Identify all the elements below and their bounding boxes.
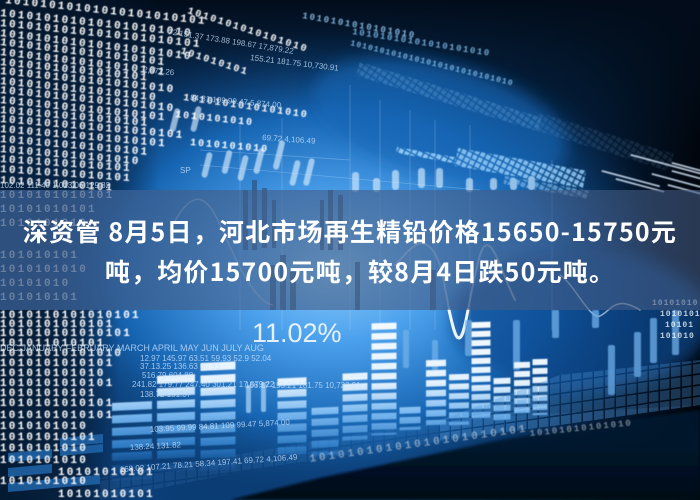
binary rows upper left: 1010101010101010101010 bbox=[0, 8, 193, 40]
binary rows upper left: 1010101010101010101010 bbox=[0, 28, 193, 64]
binary column right: 101010 bbox=[660, 332, 695, 341]
binary rows upper left: 10101010101010101010 bbox=[0, 85, 176, 115]
binary rows upper left: 10101010101010101010101 bbox=[0, 18, 202, 51]
binary rows upper left: 101010101010101010101 bbox=[0, 114, 185, 142]
binary rows lower left: 1010101010101 bbox=[0, 410, 114, 422]
month axis and small numeric table: 168.02 107.21 78.21 58.34 197.41 69.72 4,106.49 bbox=[120, 453, 298, 474]
binary rows upper left: 1010101010101010101 bbox=[0, 37, 167, 69]
binary rows lower left: 1010101010101 bbox=[0, 378, 114, 390]
binary rows upper left: 10101010101010101010 bbox=[0, 66, 176, 96]
binary rows upper left: 10101010101010101 bbox=[0, 105, 150, 130]
small numeric labels upper: SP bbox=[180, 166, 191, 175]
binary rows upper left: 101010101010101010 bbox=[0, 76, 158, 105]
binary rows lower left: 1010101010101 bbox=[0, 398, 114, 410]
binary rows upper left: 10101010101010101 bbox=[0, 134, 150, 159]
tile floor right bbox=[100, 360, 700, 500]
binary rows upper left: 1010101010101010101 bbox=[0, 47, 167, 79]
binary rows upper left: 1010101010101010 bbox=[182, 93, 309, 122]
top right binary stream: 1010101010101010 bbox=[301, 11, 417, 41]
caption text: 吨，均价15700元吨，较8月4日跌50元吨。 bbox=[105, 253, 615, 289]
binary rows in middle left under band: 1010101010101 bbox=[0, 190, 114, 202]
small numeric labels upper: 155.21 181.75 10,730.91 bbox=[250, 53, 340, 73]
binary rows lower left: 1010101010 bbox=[0, 443, 88, 455]
binary column right: 1010101 bbox=[660, 310, 700, 319]
binary rows lower left bbox=[0, 310, 155, 500]
binary rows in middle left under band: 1010101010 bbox=[0, 264, 88, 276]
pixel strip above candles bbox=[396, 147, 589, 199]
small numeric labels upper bbox=[0, 27, 340, 190]
binary rows upper left: 101010101010101 bbox=[0, 164, 132, 185]
month axis and small numeric table: 12.97 145.97 63.51 59.93 52.9 52.04 bbox=[140, 354, 272, 363]
binary rows upper left: 1010101010 bbox=[190, 138, 269, 156]
binary rows lower left: 10101010101 bbox=[0, 432, 97, 444]
binary rows in middle left under band: 1010101010 bbox=[0, 218, 88, 230]
binary rows upper left: 1010101010101 bbox=[0, 175, 115, 195]
top right binary stream: 1010101010101010101010101010 bbox=[349, 39, 514, 89]
month axis and small numeric table: 103.95 99.99 84.81 109 99.47 5,874.00 bbox=[150, 418, 291, 434]
month axis and small numeric table: 241.82 179.77 247.40 301.21 17,879.22 bbox=[132, 380, 275, 389]
binary rows lower left: 1010101010101 bbox=[0, 358, 114, 370]
top right binary stream: 10101010101010101010 bbox=[352, 27, 491, 59]
small numeric labels upper: 72 151.37 173.88 198.67 17,879.22 bbox=[168, 27, 295, 56]
bar chart bbox=[132, 322, 540, 480]
binary rows lower left: 101010101010 bbox=[0, 368, 106, 380]
binary rows upper left: 1010101010101010101 bbox=[0, 124, 167, 151]
top candlesticks bbox=[169, 106, 535, 192]
line chart bbox=[170, 199, 640, 338]
binary rows upper left: 101010101010101 bbox=[0, 154, 132, 175]
binary rows in middle left under band: 10101010 bbox=[0, 278, 70, 290]
small numeric labels upper: 102.02 111.40 1,013.06 129.82 bbox=[0, 181, 111, 190]
month axis and small numeric table: 156.17 155.21 181.75 10,730.91 bbox=[245, 381, 361, 390]
binary rows upper left bbox=[0, 0, 309, 195]
binary rows lower left: 1010110101010101 bbox=[0, 310, 141, 322]
binary column right bbox=[652, 299, 700, 341]
lower candlesticks bbox=[246, 310, 679, 413]
binary rows upper left: 1010101010101010 bbox=[186, 6, 309, 56]
month axis and small numeric table: 138.24 131.82 bbox=[130, 440, 182, 452]
binary rows lower left: 10101010101010 bbox=[0, 348, 123, 360]
grid lines bbox=[200, 85, 552, 330]
small numeric labels upper: 2,472.26 bbox=[143, 65, 175, 77]
dark ground bbox=[230, 410, 700, 500]
binary rows lower left: 101011010101 bbox=[0, 338, 106, 350]
binary rows in middle left under band: 101010101 bbox=[0, 292, 79, 304]
month axis and small numeric table: 138.72 151.37 bbox=[140, 390, 192, 399]
month axis and small numeric table bbox=[0, 343, 361, 474]
binary rows lower left: 1010101010101 bbox=[0, 319, 114, 331]
binary rows lower left: 1010101010 bbox=[0, 476, 88, 488]
month axis and small numeric table: 516.79 604.88 bbox=[142, 371, 194, 380]
small numeric labels upper: 84.81 109 99.47 5,874.00 bbox=[190, 93, 282, 110]
faint charts under band bbox=[243, 180, 436, 310]
11.02% figure: 11.02% bbox=[252, 318, 342, 348]
month axis and small numeric table: 37.13.25 136.63 60.93 bbox=[140, 362, 221, 371]
binary rows in middle left under band bbox=[0, 190, 114, 304]
left lower bars bbox=[8, 434, 103, 492]
binary rows in middle left under band: 10101010101 bbox=[0, 204, 97, 216]
small numeric labels upper: 69.72 4,106.49 bbox=[262, 133, 316, 146]
binary column right: 10101010 bbox=[652, 299, 698, 308]
binary rows lower left: 10101010101 bbox=[58, 467, 155, 479]
binary rows lower left: 101010101010101 bbox=[0, 328, 132, 340]
binary rows upper left: 1010101010101010101 bbox=[0, 95, 167, 124]
reflected binary bbox=[309, 418, 633, 466]
binary rows lower left: 1010101010 bbox=[0, 421, 88, 433]
caption text: 深资管 8月5日，河北市场再生精铅价格15650-15750元 bbox=[23, 213, 677, 249]
reflected binary: 10101010101010101010101 bbox=[309, 423, 529, 466]
month axis and small numeric table: DEC JANUARY FEBRUARY MARCH APRIL MAY JUN JULY AUG bbox=[0, 343, 264, 353]
binary rows in middle left under band: 101010101 bbox=[0, 250, 79, 262]
binary rows upper left: 1010101010 bbox=[175, 110, 254, 129]
top right binary stream bbox=[301, 11, 674, 171]
binary rows lower left: 10101010101 bbox=[0, 388, 97, 400]
binary rows upper left: 101010101 bbox=[179, 46, 250, 79]
right white data dashes bbox=[602, 154, 700, 196]
binary column right: 10101 bbox=[665, 321, 694, 330]
binary rows lower left: 1010101010 bbox=[0, 455, 88, 467]
binary rows upper left: 10101010101010101 bbox=[0, 57, 150, 85]
caption band bbox=[0, 190, 700, 310]
reflected binary: 10101010101010 bbox=[529, 418, 633, 439]
binary rows upper left: 1010101010101010 bbox=[0, 144, 141, 168]
caption text bbox=[23, 213, 677, 289]
